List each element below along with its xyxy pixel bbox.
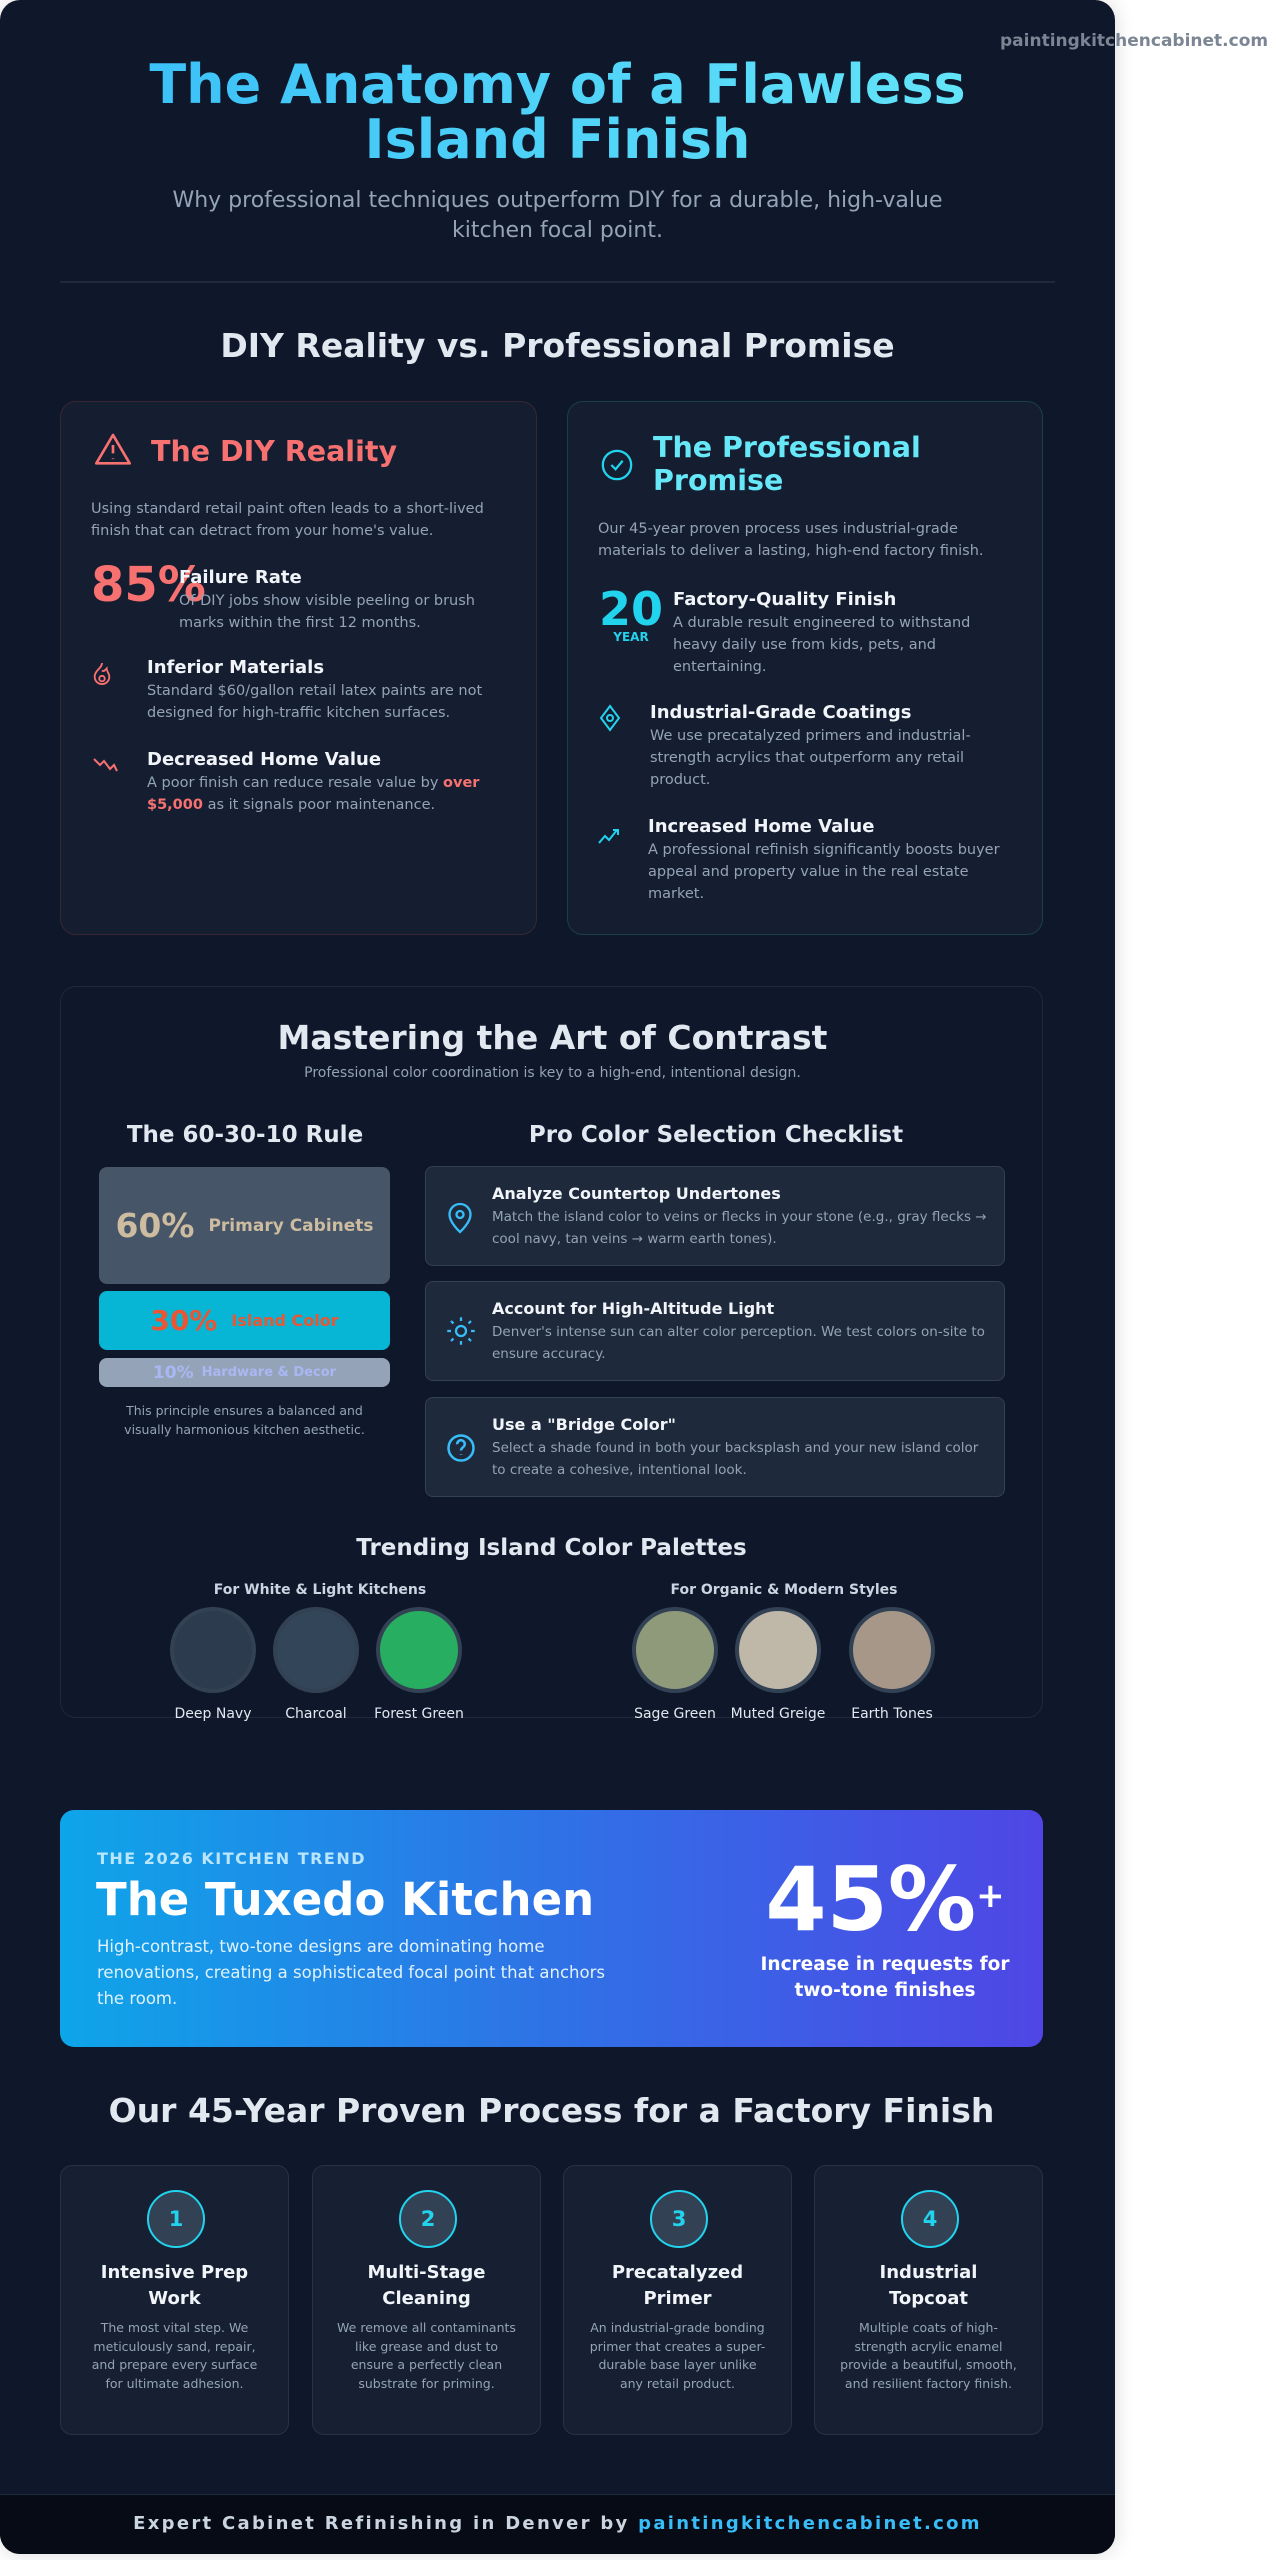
process heading: Our 45-Year Proven Process for a Factory Finish: [109, 2091, 994, 2130]
bar 30: Island Color: [231, 1311, 339, 1330]
panel: contrast: [60, 986, 1043, 1718]
palette group: light kitchens: Charcoal: [285, 1706, 347, 1722]
stat 45%: 45%+: [765, 1848, 1005, 1951]
heading: [653, 431, 921, 497]
step 2: Multi-Stage: [368, 2262, 485, 2283]
step 3: Precatalyzed: [612, 2262, 743, 2283]
step 1: Work: [148, 2288, 201, 2309]
footer: Expert Cabinet Refinishing in Denver by paintingkitchencabinet.com: [133, 2513, 982, 2534]
step 3: Primer: [643, 2288, 712, 2309]
bar 60: 60%: [115, 1206, 194, 1245]
item: inferior materials: Inferior Materials: [147, 657, 324, 678]
bar 10: Hardware & Decor: [202, 1365, 336, 1380]
intro text: Using standard retail paint often leads to a short-lived finish that can detract from your home's value.: [91, 501, 484, 539]
palette group: organic: Muted Greige: [731, 1706, 825, 1722]
checklist item 3: Use a "Bridge Color": [492, 1415, 676, 1434]
checklist item 1: Match the island color to veins or flecks in your stone (e.g., gray flecks → cool navy, tan veins → warm earth tones).: [492, 1209, 987, 1247]
60-30-10 rule: This principle ensures a balanced and visually harmonious kitchen aesthetic.: [124, 1403, 365, 1437]
stat 45%: Increase in requests for: [761, 1954, 1009, 1975]
step 1: 1: [169, 2207, 183, 2231]
title: Island Finish: [364, 108, 750, 171]
stat: 20 year: [599, 582, 970, 675]
step 2: 2: [421, 2207, 435, 2231]
checklist item 1: [425, 1166, 1005, 1266]
checklist heading: Pro Color Selection Checklist: [529, 1122, 903, 1148]
stat: 20 year: YEAR: [613, 630, 649, 644]
panel: DIY reality: [60, 401, 537, 935]
stat: 85%: Failure Rate: [179, 567, 302, 588]
step 1: The most vital step. We meticulously sand, repair, and prepare every surface for ultimate adhesion.: [92, 2320, 257, 2391]
heading: The Professional: [653, 431, 921, 464]
item: coatings: Industrial-Grade Coatings: [650, 702, 911, 723]
step 1: Intensive Prep: [101, 2262, 248, 2283]
heading: Mastering the Art of Contrast: [278, 1018, 827, 1057]
title: [60, 57, 1055, 167]
icon: check circle: [602, 450, 632, 480]
checklist item 2: Denver's intense sun can alter color perception. We test colors on-site to ensure accuracy.: [492, 1324, 985, 1362]
step 1: [60, 2165, 289, 2435]
stat: 85%: 85%: [91, 557, 206, 613]
subtitle: Why professional techniques outperform DIY for a durable, high-value kitchen focal point.: [172, 188, 943, 243]
banner: tuxedo kitchen: THE 2026 KITCHEN TREND: [97, 1849, 366, 1868]
step 3: 3: [672, 2207, 686, 2231]
palette group: organic: Earth Tones: [851, 1706, 933, 1722]
palette group: organic: [632, 1582, 935, 1722]
palette group: light kitchens: For White & Light Kitchens: [214, 1582, 426, 1598]
item: decreased value: A poor finish can reduce resale value by over $5,000 as it signals poor maintenance.: [147, 775, 479, 813]
palettes heading: Trending Island Color Palettes: [356, 1535, 747, 1561]
heading: Promise: [653, 464, 783, 497]
checklist item 3: Select a shade found in both your backsplash and your new island color to create a cohesive, intentional look.: [492, 1440, 978, 1478]
item: increased value: [598, 816, 1000, 902]
item: inferior materials: [94, 657, 482, 721]
step 2: [312, 2165, 541, 2435]
item: inferior materials: Standard $60/gallon retail latex paints are not designed for high-traffic kitchen surfaces.: [147, 683, 482, 721]
intro text: Our 45-year proven process uses industrial-grade materials to deliver a lasting, high-end factory finish.: [598, 521, 984, 559]
palette group: organic: Sage Green: [634, 1706, 716, 1722]
stat: 85%: [91, 557, 475, 631]
footer: [0, 2494, 1115, 2554]
bar 10: 10%: [153, 1362, 194, 1382]
stat 45%: [761, 1848, 1010, 2001]
item: decreased value: Decreased Home Value: [147, 749, 381, 770]
stat: 20 year: 20: [599, 582, 663, 636]
palette group: organic: For Organic & Modern Styles: [670, 1582, 898, 1598]
step 4: Industrial: [880, 2262, 977, 2283]
bar 10: [99, 1358, 390, 1387]
icon: warning: [94, 434, 131, 465]
step 4: Topcoat: [889, 2288, 968, 2309]
bar 30: [99, 1291, 390, 1350]
bar 60: [99, 1167, 390, 1284]
stat: 85%: Of DIY jobs show visible peeling or brush marks within the first 12 months.: [179, 593, 475, 631]
palette group: light kitchens: Deep Navy: [175, 1706, 251, 1722]
step 2: We remove all contaminants like grease and dust to ensure a perfectly clean substrate for priming.: [337, 2320, 516, 2391]
banner: tuxedo kitchen: The Tuxedo Kitchen: [96, 1873, 594, 1926]
checklist item 1: Analyze Countertop Undertones: [492, 1184, 781, 1203]
heading: The DIY Reality: [151, 435, 397, 468]
banner: tuxedo kitchen: High-contrast, two-tone designs are dominating home renovations, creating a sophisticated focal point that anchors the room.: [97, 1937, 605, 2008]
item: coatings: [600, 702, 971, 788]
stat: 20 year: Factory-Quality Finish: [673, 589, 896, 610]
step 3: [563, 2165, 792, 2435]
step 3: An industrial-grade bonding primer that creates a super-durable base layer unlike any retail product.: [590, 2320, 765, 2391]
palette group: light kitchens: Forest Green: [374, 1706, 464, 1722]
banner: tuxedo kitchen: [60, 1810, 1043, 2047]
section heading: DIY vs Pro: DIY Reality vs. Professional Promise: [220, 326, 895, 365]
step 4: [814, 2165, 1043, 2435]
60-30-10 rule: [99, 1122, 390, 1437]
checklist item 3: [425, 1397, 1005, 1497]
step 4: Multiple coats of high-strength acrylic enamel provide a beautiful, smooth, and resilient factory finish.: [840, 2320, 1017, 2391]
bar 60: Primary Cabinets: [208, 1216, 374, 1236]
subheading: Professional color coordination is key to a high-end, intentional design.: [304, 1065, 801, 1081]
watermark: paintingkitchencabinet.com: [1000, 31, 1268, 51]
panel: professional promise: [567, 401, 1043, 935]
item: increased value: Increased Home Value: [648, 816, 874, 837]
item: increased value: A professional refinish significantly boosts buyer appeal and property value in the real estate market.: [648, 842, 1000, 902]
item: coatings: We use precatalyzed primers and industrial-strength acrylics that outperform any retail product.: [650, 728, 971, 788]
60-30-10 rule: The 60-30-10 Rule: [127, 1122, 363, 1148]
step 2: Cleaning: [382, 2288, 471, 2309]
checklist item 2: Account for High-Altitude Light: [492, 1299, 774, 1318]
item: decreased value: [93, 749, 480, 813]
step 4: 4: [923, 2207, 937, 2231]
title: The Anatomy of a Flawless: [149, 53, 966, 116]
palette group: light kitchens: [170, 1582, 464, 1722]
bar 30: 30%: [150, 1304, 217, 1337]
stat: 20 year: A durable result engineered to withstand heavy daily use from kids, pets, and entertaining.: [673, 615, 970, 675]
checklist item 2: [425, 1281, 1005, 1381]
stat 45%: two-tone finishes: [794, 1980, 976, 2001]
